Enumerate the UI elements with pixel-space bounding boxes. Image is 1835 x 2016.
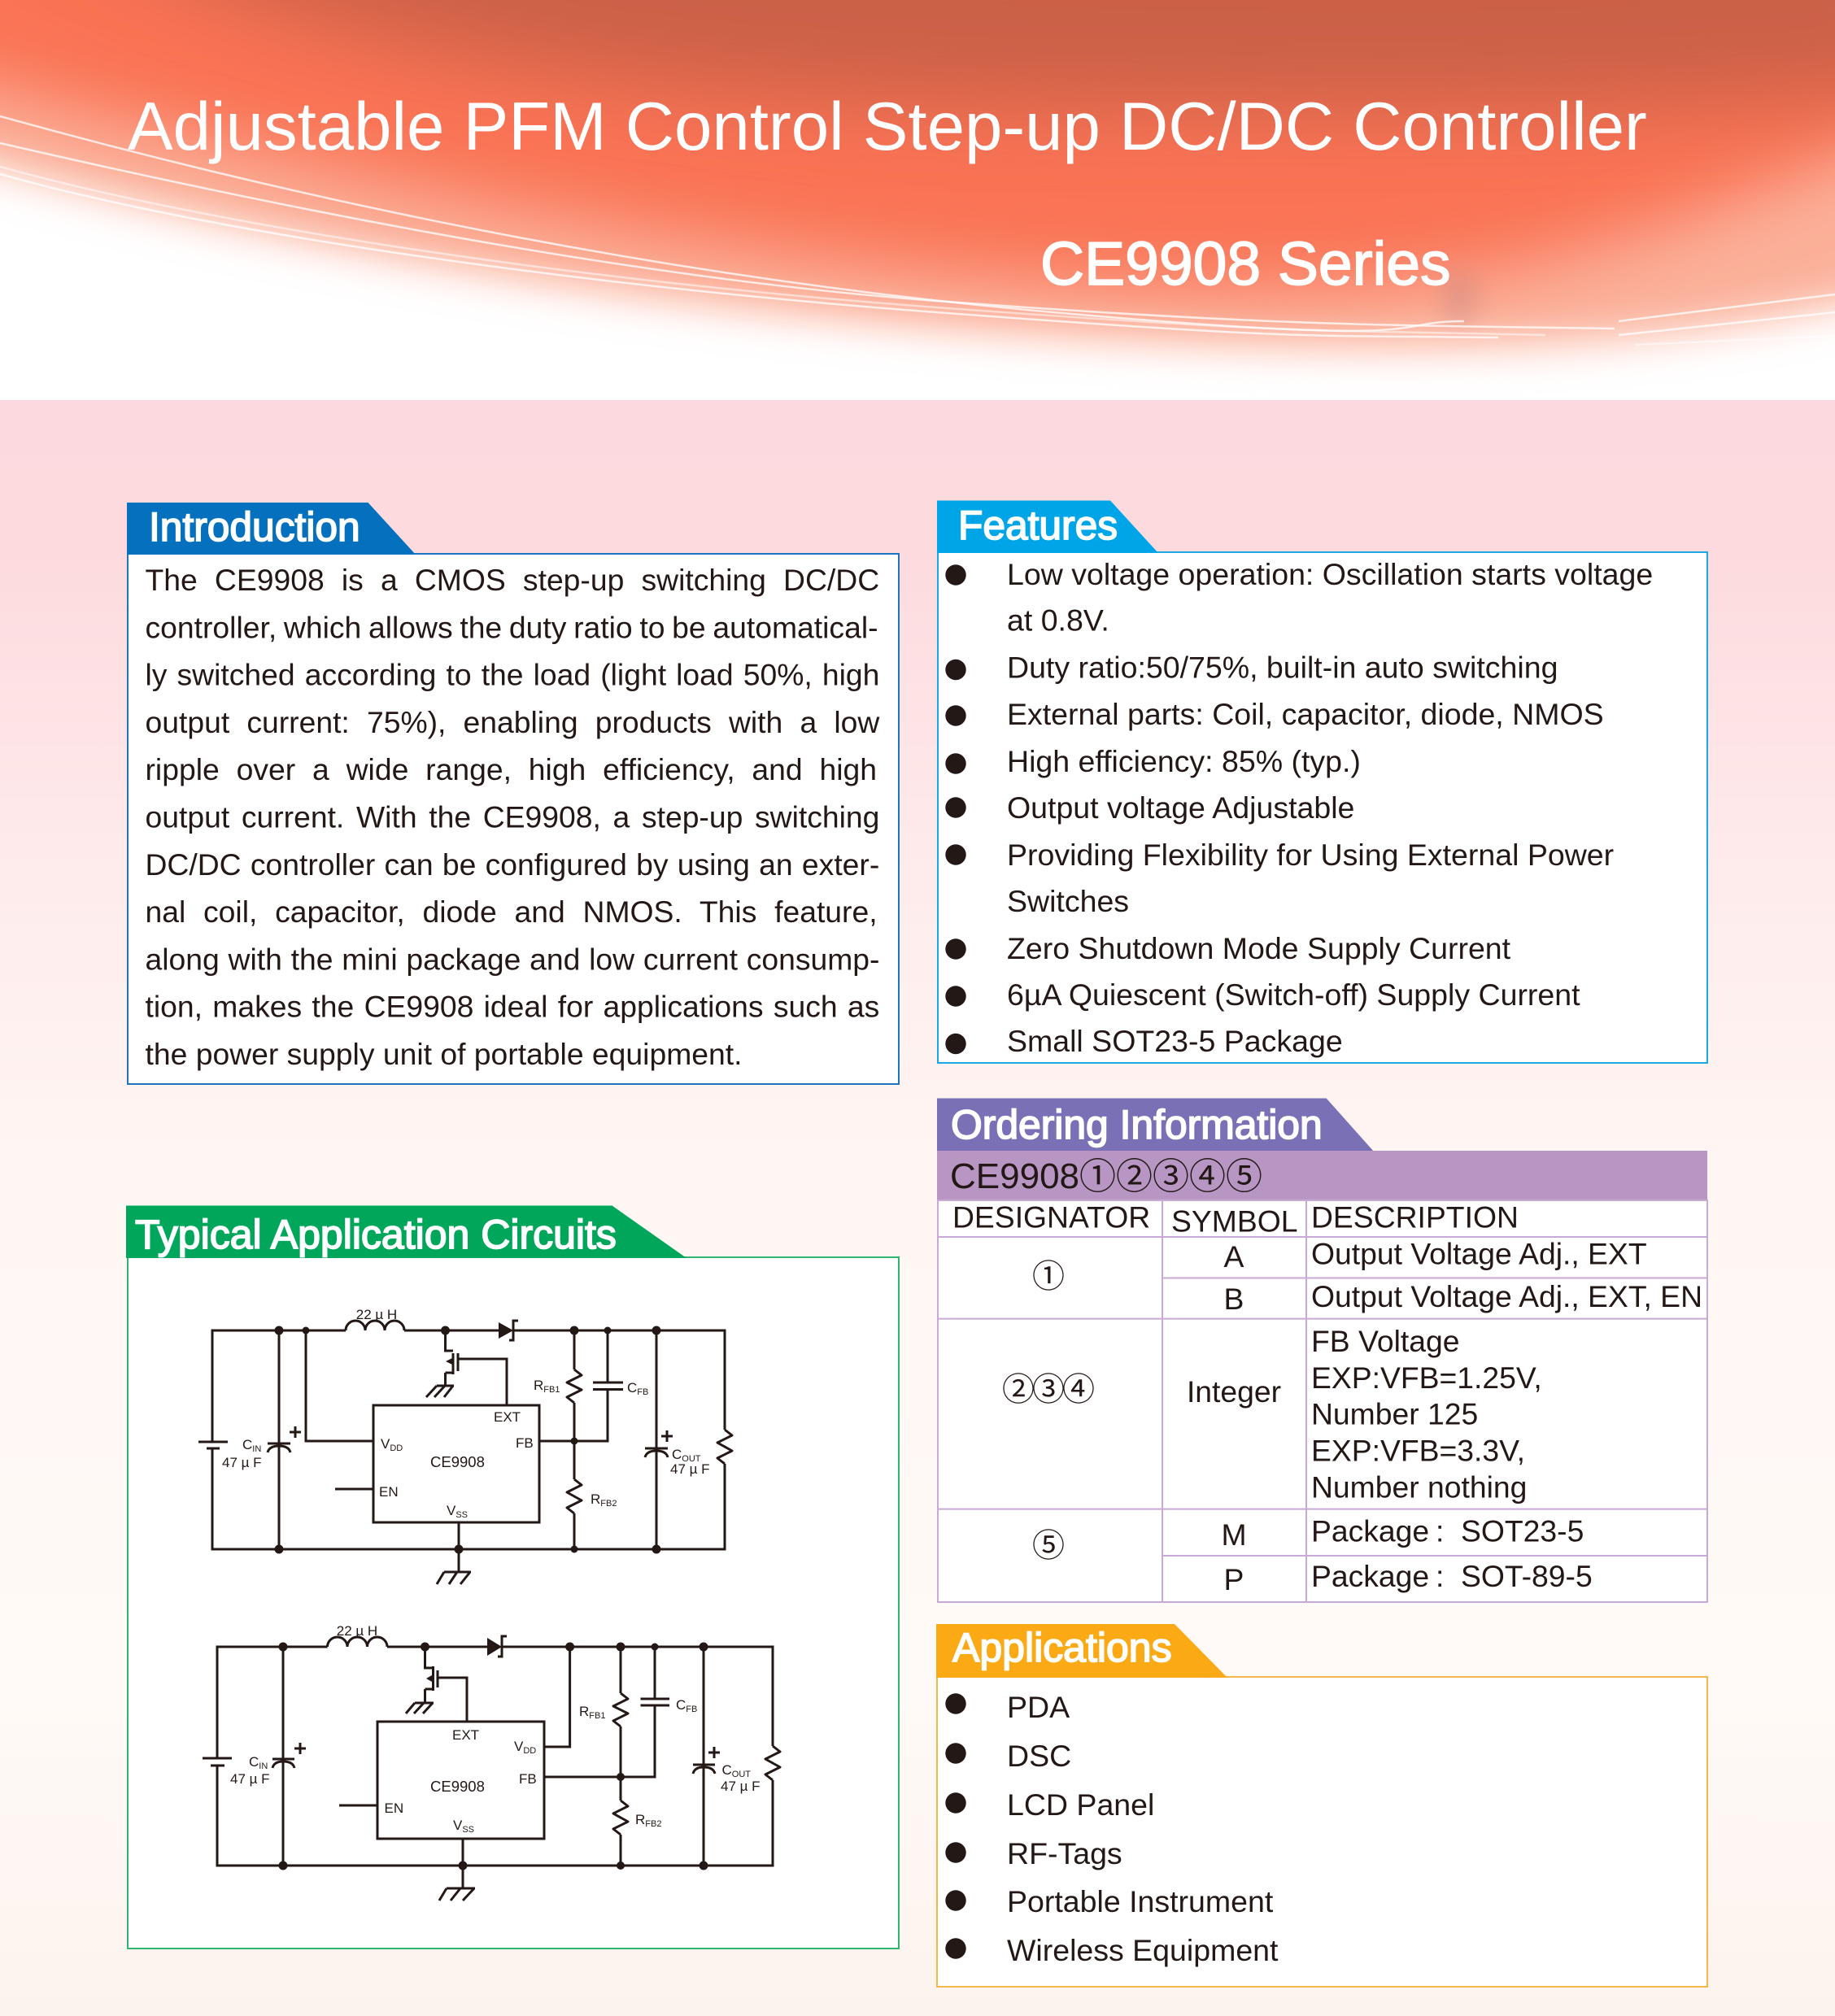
component labels: IN <box>259 1761 268 1771</box>
plus signs <box>294 1743 720 1758</box>
grounds <box>406 1703 475 1901</box>
ordering table: Output Voltage Adj., EXT <box>1311 1237 1647 1271</box>
text block: introduction body: along with the mini package and low current consump- <box>145 942 879 976</box>
ordering table: DESCRIPTION <box>1311 1200 1519 1234</box>
ordering table: DESIGNATOR <box>952 1200 1150 1234</box>
component labels: V <box>381 1436 390 1452</box>
ordering table: A <box>1224 1239 1244 1274</box>
heading: features: Features <box>958 503 1118 548</box>
component labels: C <box>722 1762 732 1778</box>
component labels: R <box>534 1378 543 1393</box>
ordering table: Integer <box>1187 1374 1281 1409</box>
component labels: OUT <box>732 1770 751 1779</box>
heading: typical application circuits: Typical Application Circuits <box>135 1212 617 1257</box>
application list text: PDA <box>1007 1690 1070 1724</box>
inductor <box>327 1637 387 1647</box>
heading: ordering information: Ordering Information <box>951 1102 1323 1147</box>
component labels: C <box>676 1697 686 1713</box>
text block: introduction body: nal coil, capacitor, diode and NMOS. This feature, <box>145 895 878 929</box>
ordering table: EXP:VFB=1.25V, <box>1311 1361 1542 1395</box>
component labels: IN <box>252 1444 261 1454</box>
component labels: 22 µ H <box>356 1307 397 1322</box>
chip outline <box>377 1722 544 1839</box>
heading: applications: Applications <box>952 1625 1172 1670</box>
feature list text: at 0.8V. <box>1007 603 1109 638</box>
component labels: FB2 <box>645 1819 661 1829</box>
ordering table: Package <box>1311 1514 1429 1548</box>
ordering table: ⑤ <box>1032 1528 1064 1564</box>
component labels: EN <box>379 1484 399 1500</box>
feature list text: High efficiency: 85% (typ.) <box>1007 744 1361 778</box>
text block: introduction body: ripple over a wide range, high efficiency, and high <box>145 752 877 786</box>
feature list text <box>1007 557 1653 1058</box>
component labels: EXT <box>452 1727 479 1743</box>
junction dots <box>278 1643 708 1870</box>
ordering table: EXP:VFB=3.3V, <box>1311 1434 1525 1468</box>
ordering table: Package <box>1311 1559 1429 1593</box>
ordering table <box>938 1200 1707 1602</box>
component labels: V <box>453 1818 462 1833</box>
heading: features <box>937 501 1158 553</box>
battery <box>203 1758 232 1766</box>
output capacitor <box>693 1765 715 1774</box>
component labels: FB <box>686 1705 697 1714</box>
component labels: 47 µ F <box>670 1461 710 1477</box>
nmos transistor <box>426 1666 438 1691</box>
text block: introduction body: the power supply unit of portable equipment. <box>145 1037 742 1071</box>
text block: introduction body: output current: 75%), enabling products with a low <box>145 705 880 739</box>
text block: introduction body <box>145 563 880 1071</box>
application list text <box>1007 1690 1279 1967</box>
component labels: SS <box>455 1510 468 1520</box>
feature list text: Zero Shutdown Mode Supply Current <box>1007 931 1511 965</box>
component labels: FB <box>637 1387 648 1397</box>
diode <box>499 1321 518 1340</box>
component labels: DD <box>390 1443 403 1453</box>
ordering table: Output Voltage Adj., EXT, EN <box>1311 1279 1702 1313</box>
component labels: CE9908 <box>430 1453 485 1470</box>
ordering table: ②③④ <box>1002 1372 1094 1408</box>
component labels: C <box>242 1437 252 1452</box>
ordering table: : <box>1436 1559 1444 1593</box>
component labels: DD <box>523 1746 536 1756</box>
feedback capacitor <box>641 1699 669 1705</box>
ordering table: SOT-89-5 <box>1461 1559 1593 1593</box>
junction dots <box>275 1326 660 1553</box>
wires <box>217 1647 773 1888</box>
ordering table: FB Voltage <box>1311 1324 1459 1358</box>
component labels: 47 µ F <box>721 1779 761 1794</box>
wires <box>212 1330 725 1572</box>
component labels: R <box>579 1704 589 1719</box>
ordering table: Number nothing <box>1311 1470 1527 1504</box>
component labels: FB <box>519 1771 537 1787</box>
header banner background <box>0 0 1835 400</box>
panel: introduction <box>127 503 899 1084</box>
component labels: C <box>249 1754 259 1770</box>
application list text: DSC <box>1007 1739 1071 1773</box>
ordering table: SOT23-5 <box>1461 1514 1584 1548</box>
ordering table: ① <box>1032 1259 1064 1295</box>
component labels: V <box>514 1739 523 1754</box>
feature list text: External parts: Coil, capacitor, diode, NMOS <box>1007 697 1604 731</box>
application list text: LCD Panel <box>1007 1787 1154 1822</box>
ordering table: : <box>1436 1514 1444 1548</box>
feature bullets <box>945 564 966 1054</box>
resistors <box>567 1369 732 1513</box>
ordering table: SYMBOL <box>1171 1204 1297 1239</box>
plus signs <box>290 1426 673 1442</box>
feature list text: Providing Flexibility for Using External Power <box>1007 838 1614 872</box>
component labels: 47 µ F <box>222 1455 262 1470</box>
diode <box>487 1636 507 1657</box>
resistors <box>613 1693 780 1835</box>
text block: introduction body: The CE9908 is a CMOS step-up switching DC/DC <box>145 563 879 597</box>
panel: applications <box>936 1624 1707 1987</box>
application list text: Portable Instrument <box>1007 1884 1274 1918</box>
component labels: SS <box>462 1825 474 1835</box>
ordering table: B <box>1224 1282 1244 1316</box>
application list text: RF-Tags <box>1007 1836 1122 1870</box>
feature list text: 6µA Quiescent (Switch-off) Supply Current <box>1007 978 1580 1012</box>
part number bar: ①②③④⑤ <box>1079 1156 1262 1197</box>
component labels <box>222 1307 710 1520</box>
component labels: FB1 <box>543 1385 560 1395</box>
heading: introduction <box>127 503 416 555</box>
component labels: FB <box>516 1435 534 1451</box>
input capacitor <box>272 1759 294 1768</box>
battery <box>198 1442 228 1448</box>
heading: applications <box>936 1624 1227 1678</box>
component labels: FB2 <box>600 1499 617 1509</box>
output capacitor <box>645 1448 668 1457</box>
component labels: FB1 <box>589 1711 605 1721</box>
ordering table: Number 125 <box>1311 1397 1478 1431</box>
component labels: EXT <box>494 1409 521 1425</box>
text block: introduction body: output current. With the CE9908, a step-up switching <box>145 800 879 834</box>
inductor <box>346 1321 404 1330</box>
panel: typical application circuits <box>126 1205 899 1949</box>
application list text: Wireless Equipment <box>1007 1933 1279 1967</box>
text block: introduction body: tion, makes the CE9908 ideal for applications such as <box>145 990 879 1024</box>
component labels: C <box>627 1380 637 1396</box>
part number bar <box>937 1151 1707 1200</box>
ordering table: P <box>1224 1562 1244 1596</box>
title: Adjustable PFM Control Step-up DC/DC Controller <box>128 89 1647 164</box>
component labels: OUT <box>682 1454 701 1464</box>
feature list text: Output voltage Adjustable <box>1007 790 1354 825</box>
nmos transistor <box>446 1353 458 1374</box>
text block: introduction body: controller, which allows the duty ratio to be automatical- <box>145 610 878 644</box>
grounds <box>426 1386 471 1584</box>
circuit diagram 2 <box>203 1623 780 1901</box>
feature list text: Small SOT23-5 Package <box>1007 1024 1343 1058</box>
component labels: R <box>591 1491 600 1507</box>
input capacitor <box>268 1443 290 1452</box>
part number bar: CE9908 <box>950 1156 1079 1196</box>
subtitle: series name: CE9908 Series <box>1040 229 1450 298</box>
component labels: 22 µ H <box>337 1623 377 1639</box>
panel: ordering information <box>937 1098 1707 1602</box>
component labels: CE9908 <box>430 1778 485 1795</box>
text block: introduction body: ly switched according to the load (light load 50%, high <box>145 658 879 692</box>
application bullets <box>945 1693 966 1959</box>
component labels: C <box>672 1447 682 1462</box>
ordering table: M <box>1221 1517 1247 1552</box>
feedback capacitor <box>593 1382 623 1389</box>
heading: introduction: Introduction <box>149 504 360 550</box>
component labels: EN <box>384 1800 403 1816</box>
component labels: V <box>447 1503 455 1518</box>
circuit diagram 1 <box>198 1307 732 1584</box>
component labels <box>230 1623 761 1835</box>
feature list text: Switches <box>1007 884 1129 918</box>
feature list text: Low voltage operation: Oscillation starts voltage <box>1007 557 1653 591</box>
feature list text: Duty ratio:50/75%, built-in auto switching <box>1007 651 1558 685</box>
text block: introduction body: DC/DC controller can be configured by using an exter- <box>145 847 879 882</box>
component labels: 47 µ F <box>230 1771 270 1787</box>
chip outline <box>373 1405 539 1522</box>
panel: features <box>937 501 1707 1063</box>
component labels: R <box>635 1812 645 1827</box>
